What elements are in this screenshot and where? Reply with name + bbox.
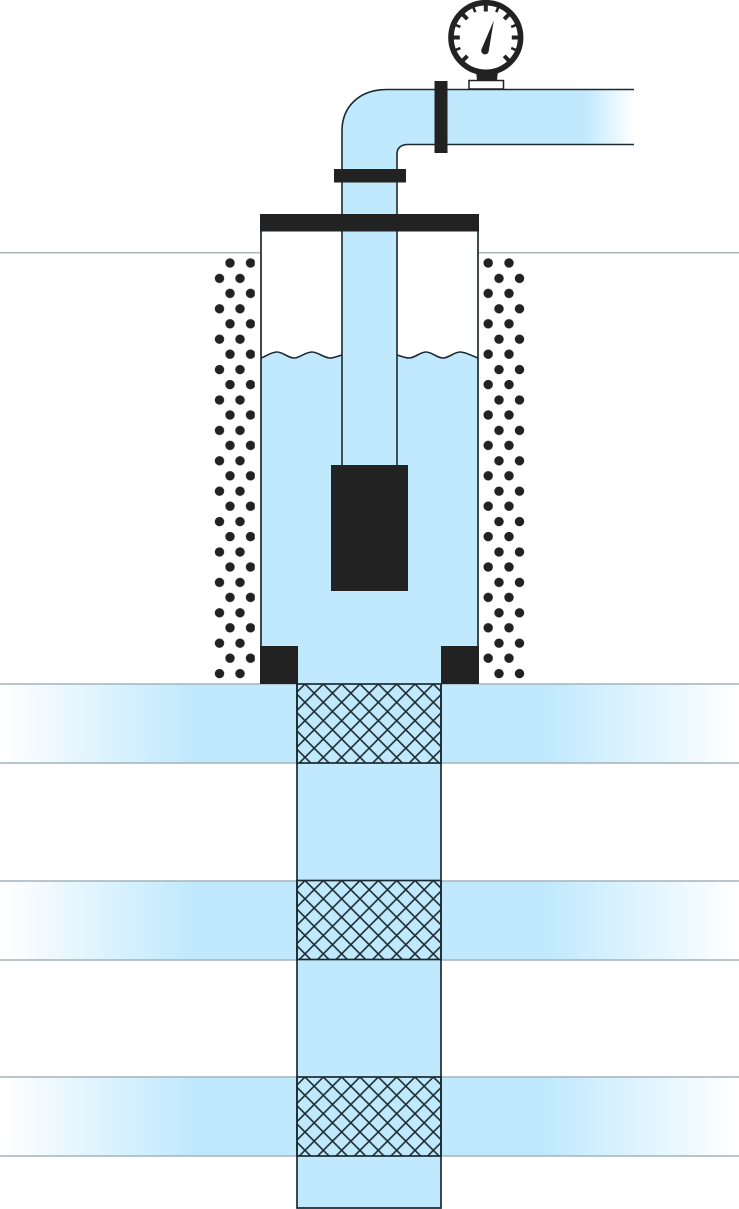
well shaft xyxy=(297,684,441,1208)
pipe flange vertical section xyxy=(334,169,406,182)
well cap xyxy=(260,214,479,232)
gravel pack right xyxy=(483,255,524,681)
gauge mount xyxy=(469,71,504,89)
well casing with water xyxy=(261,225,478,685)
gravel pack left xyxy=(214,255,255,681)
ground surface line xyxy=(0,252,739,254)
discharge pipe xyxy=(342,90,634,470)
casing foot right xyxy=(441,646,479,684)
gauge dial xyxy=(451,3,521,72)
submersible pump xyxy=(331,465,408,591)
well screen 3 xyxy=(297,1077,441,1156)
aquifer band 3 xyxy=(0,1077,739,1156)
gauge needle xyxy=(481,20,494,54)
well screen 2 xyxy=(297,880,441,960)
well screen 1 xyxy=(297,684,441,763)
casing foot left xyxy=(260,646,298,684)
aquifer band 1 xyxy=(0,684,739,763)
pipe flange horizontal section xyxy=(434,81,448,153)
pressure gauge xyxy=(451,3,521,89)
aquifer band 2 xyxy=(0,881,739,960)
